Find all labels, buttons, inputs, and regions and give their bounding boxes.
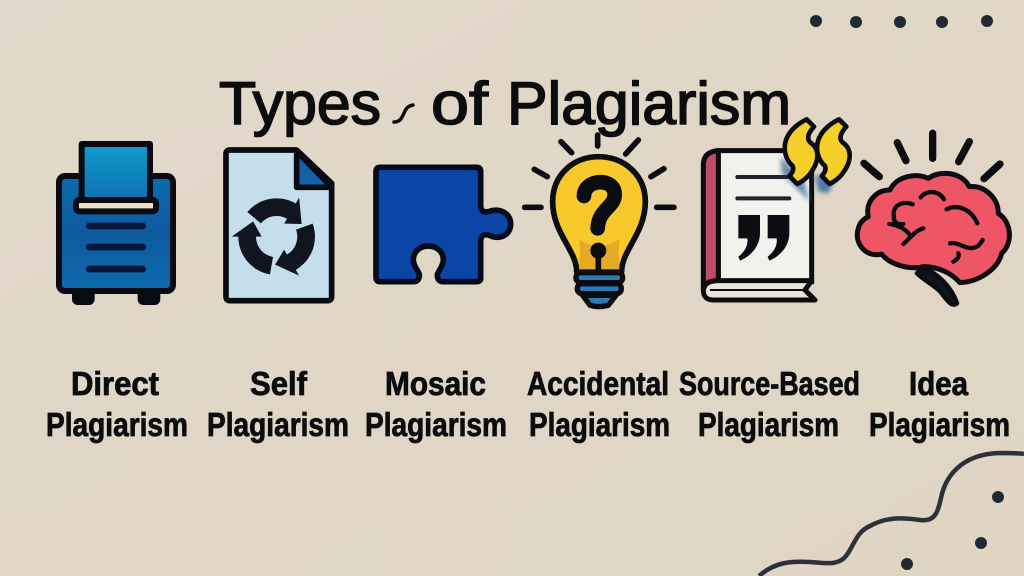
icon: light bulb with question mark <box>525 135 674 307</box>
icon: recycled document <box>226 150 332 301</box>
label: Direct Plagiarism <box>46 365 188 443</box>
title <box>219 70 791 137</box>
icon: book with quotation marks <box>703 119 850 300</box>
label: Direct Plagiarism: Plagiarism <box>46 406 188 443</box>
decorative dots: top right <box>810 15 993 28</box>
title: of <box>431 70 488 137</box>
label: Accidental Plagiarism: Accidental <box>527 365 669 402</box>
title: Plagiarism <box>507 70 791 137</box>
label: Mosaic Plagiarism <box>365 365 507 443</box>
icon: printer / copier <box>59 144 173 302</box>
label: Direct Plagiarism: Direct <box>71 365 159 402</box>
label: Idea Plagiarism: Idea <box>909 365 969 402</box>
label: Idea Plagiarism <box>869 365 1010 443</box>
icon: puzzle piece <box>376 167 511 282</box>
label: Source-Based Plagiarism <box>679 365 860 443</box>
label: Self Plagiarism: Self <box>250 365 308 402</box>
label: Accidental Plagiarism <box>527 365 670 443</box>
label: Source-Based Plagiarism: Source-Based <box>679 365 860 402</box>
decorative curve: bottom right <box>759 453 1024 576</box>
label: Mosaic Plagiarism: Plagiarism <box>365 406 507 443</box>
label: Self Plagiarism: Plagiarism <box>207 406 349 443</box>
label: Self Plagiarism <box>207 365 349 443</box>
title: Types <box>219 70 381 137</box>
label: Source-Based Plagiarism: Plagiarism <box>698 406 839 443</box>
label: Mosaic Plagiarism: Mosaic <box>385 365 486 402</box>
icon: brain with rays <box>857 133 1009 305</box>
label: Accidental Plagiarism: Plagiarism <box>529 406 670 443</box>
